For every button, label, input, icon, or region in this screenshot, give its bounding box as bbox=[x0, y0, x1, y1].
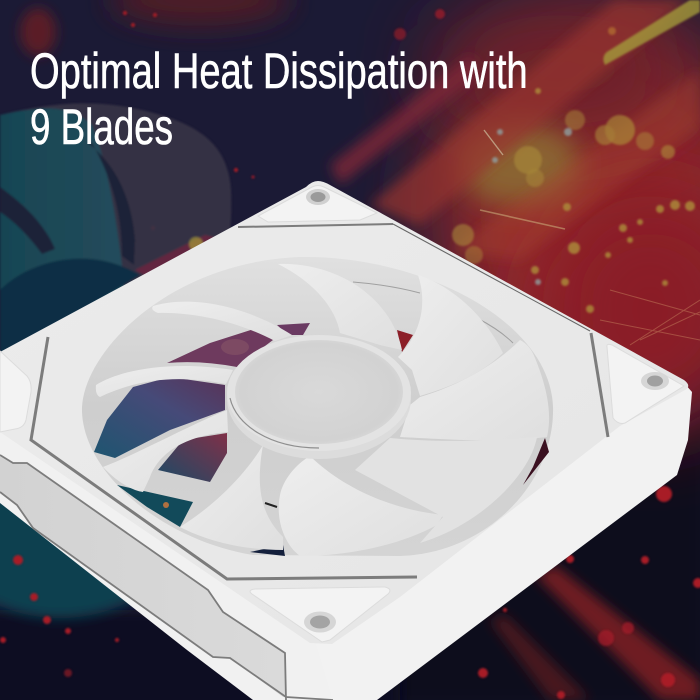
view through the fan bbox=[94, 323, 549, 556]
fan blades bbox=[96, 264, 549, 556]
fan hub bbox=[227, 335, 411, 459]
corner: left bbox=[0, 351, 31, 432]
inner wall detail lines bbox=[353, 282, 513, 343]
background fan silhouette bbox=[0, 103, 231, 380]
corner: top bbox=[238, 186, 590, 331]
blade: right bbox=[400, 340, 549, 440]
diagonal light streaks bbox=[330, 0, 700, 260]
lower-left side wall bbox=[0, 425, 335, 700]
title: 9 Blades bbox=[30, 99, 173, 155]
blade: upper left bbox=[152, 302, 292, 341]
blade: bottom right bbox=[279, 456, 443, 556]
blade: lower left bbox=[103, 410, 228, 492]
blade: left bbox=[96, 366, 233, 397]
fan opening bbox=[82, 257, 553, 556]
blade: lower right bbox=[355, 437, 537, 543]
corner: bottom bbox=[250, 587, 390, 642]
fan frame top surface bbox=[0, 181, 688, 644]
blade: top bbox=[278, 264, 402, 350]
frame groove line bbox=[31, 337, 417, 579]
title: Optimal Heat Dissipation with bbox=[30, 43, 528, 99]
corner: right bbox=[591, 333, 684, 437]
lower-left frame side panel bbox=[0, 455, 333, 700]
title bbox=[30, 43, 528, 155]
lower-right side wall bbox=[315, 384, 692, 700]
blade: upper right bbox=[398, 275, 503, 396]
blade: bottom bbox=[180, 445, 283, 550]
